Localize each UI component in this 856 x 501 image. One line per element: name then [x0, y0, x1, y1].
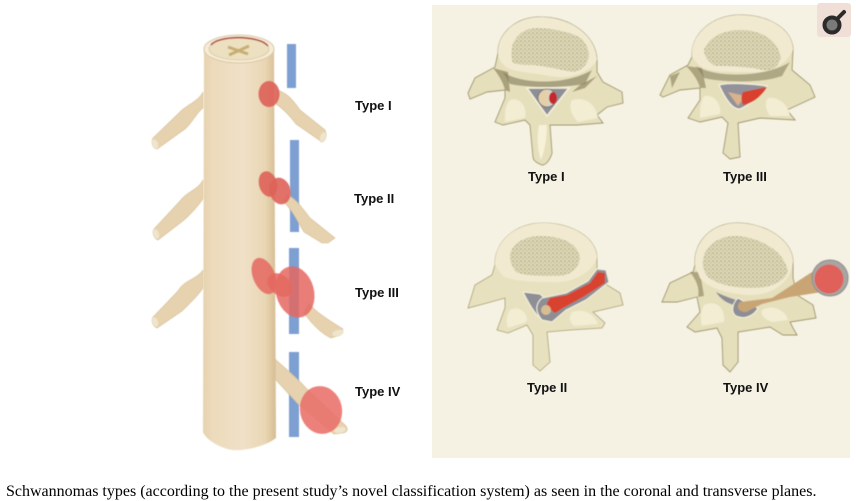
label: type II: Type II: [527, 380, 567, 395]
cord top section: [204, 35, 274, 63]
tumour: type III: [247, 254, 320, 322]
label: type IV: Type IV: [723, 380, 769, 395]
label: type III: Type III: [723, 169, 767, 184]
root end caps: [150, 131, 346, 434]
labels: coronal types: Type I: [355, 98, 392, 113]
vertebra: type IV: [662, 223, 848, 395]
tumour: type I: [258, 81, 280, 107]
blue dashed midline bars: [287, 44, 299, 437]
labels: coronal types: Type IV: [355, 384, 401, 399]
panel background: [432, 5, 850, 458]
panel: coronal spinal cord view: [150, 35, 401, 450]
tumour: type IV: [295, 382, 347, 438]
label: type I: Type I: [528, 169, 565, 184]
labels: coronal types: Type II: [354, 191, 394, 206]
labels: coronal types: Type III: [355, 285, 399, 300]
labels: coronal types: [354, 98, 401, 399]
icon: zoom magnifier badge: [817, 3, 851, 37]
tumour: type II: [256, 169, 294, 207]
cord body: [203, 50, 276, 450]
vertebra: type III: [660, 15, 815, 184]
vertebra: type I: [468, 17, 623, 184]
panel: transverse vertebra views: [432, 3, 851, 458]
vertebra: type II: [468, 223, 623, 395]
nerve roots: [152, 90, 347, 434]
tumours: [247, 81, 347, 438]
caption: Schwannomas types (according to the present study’s novel classification system) as seen in the coronal and transverse planes.: [6, 483, 816, 500]
